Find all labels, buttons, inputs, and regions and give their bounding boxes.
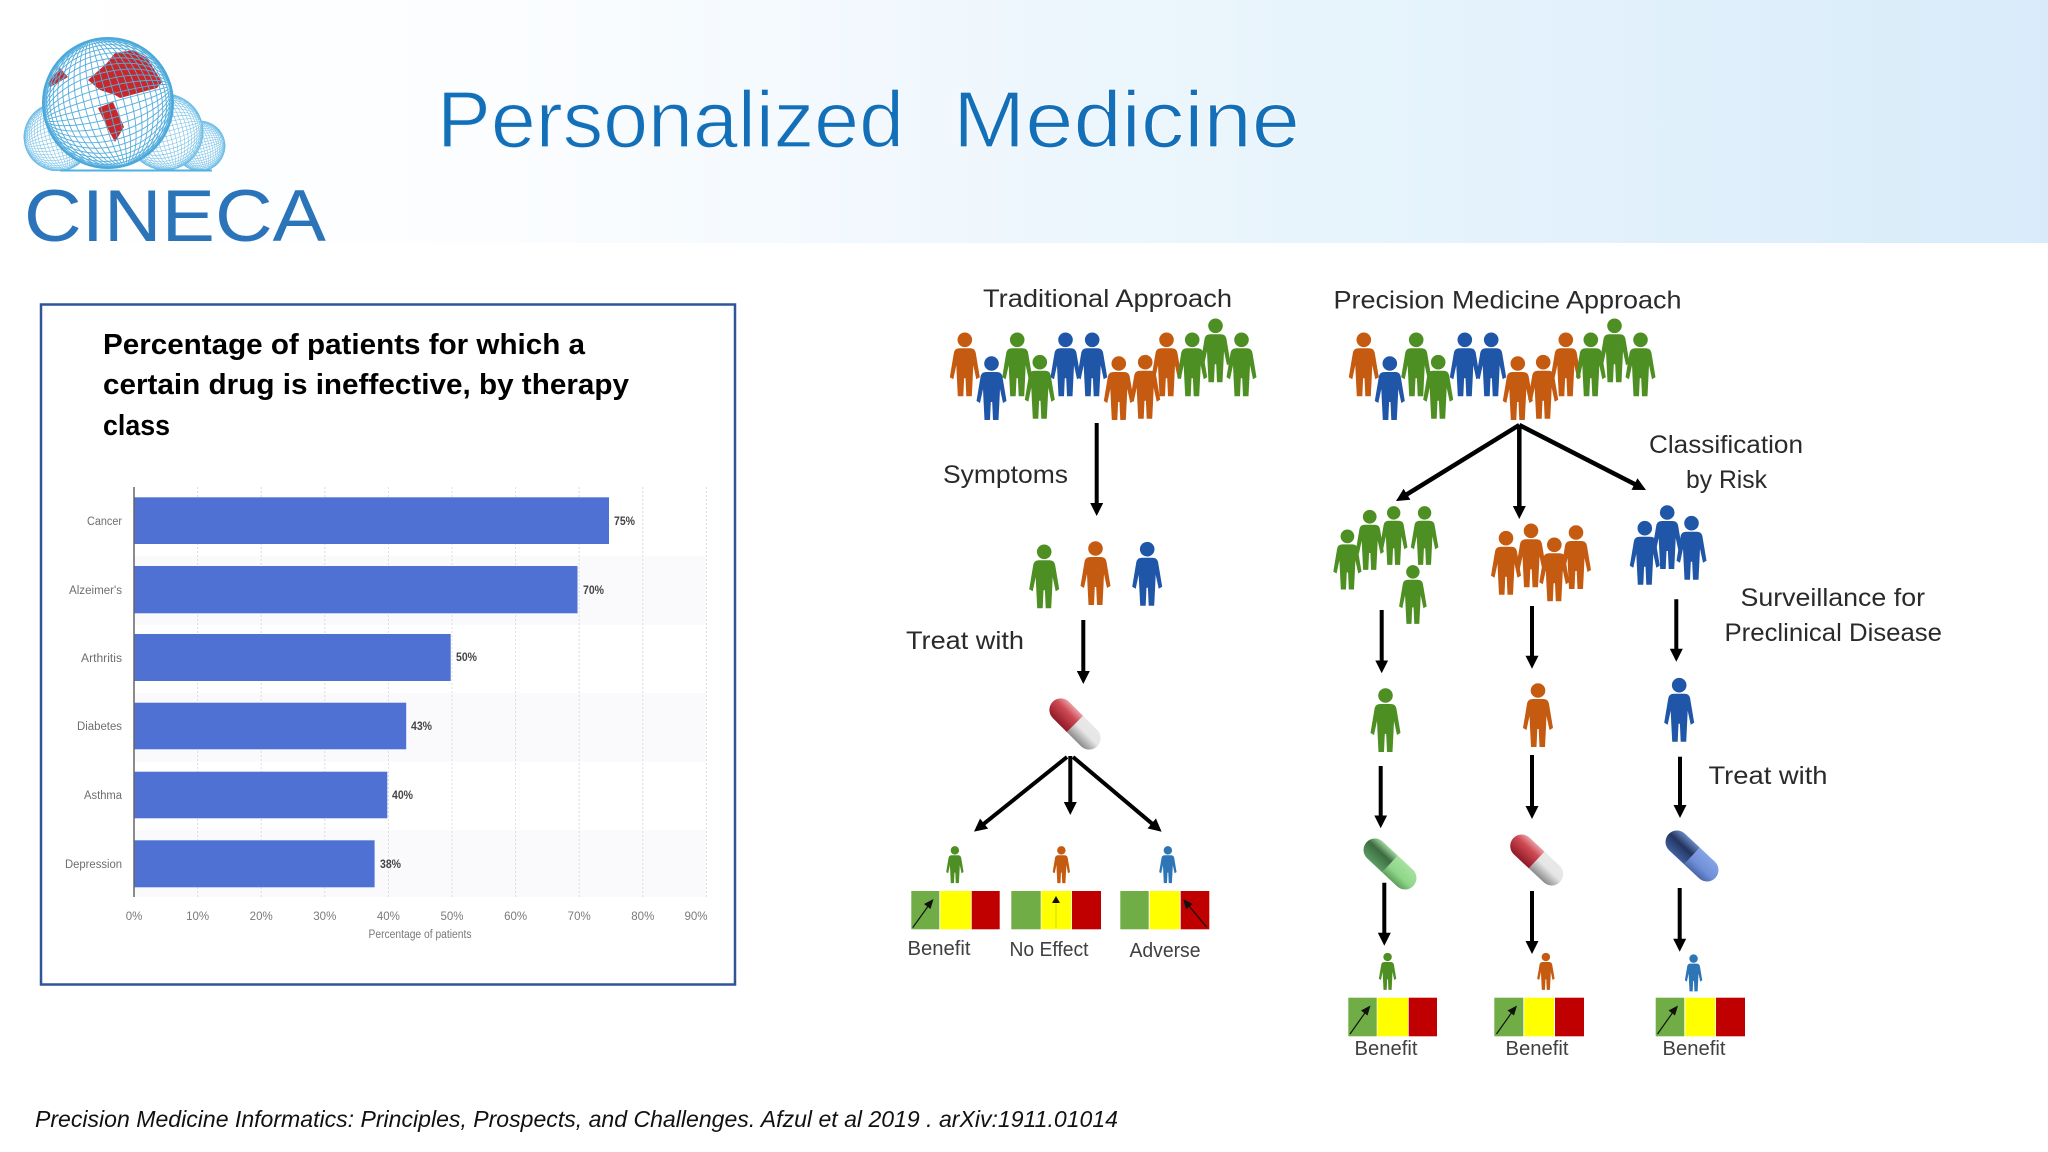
arrow: no effect branch	[1068, 756, 1072, 805]
title: Medicine	[953, 75, 1300, 164]
x axis labels: 40%	[377, 911, 400, 923]
diagram: precision medicine approach	[1333, 286, 1942, 1060]
category labels: Diabetes	[77, 721, 122, 733]
diagram: traditional approach	[906, 285, 1256, 962]
arrow: to green group	[1404, 425, 1519, 496]
label: surveillance for preclinical disease: Preclinical Disease	[1724, 619, 1942, 647]
x axis labels	[126, 911, 708, 941]
logo: CINECA	[24, 37, 326, 242]
x axis labels: 0%	[126, 911, 142, 923]
single patients	[1370, 678, 1694, 752]
outcome: blue benefit: Benefit	[1662, 1038, 1726, 1060]
value labels: 50%	[456, 652, 477, 664]
category labels: Arthritis	[81, 653, 122, 665]
category labels: Asthma	[84, 790, 123, 802]
icon: red pill	[1045, 694, 1105, 754]
icon: green pill	[1359, 834, 1421, 894]
arrows: surveillance	[1382, 599, 1676, 663]
population group	[950, 318, 1256, 420]
label: classification by risk: Classification	[1649, 431, 1803, 459]
x axis labels: 30%	[313, 911, 336, 923]
outcome: blue benefit	[1656, 954, 1745, 1060]
risk group: blue	[1630, 505, 1706, 585]
panel: drug ineffectiveness chart	[41, 304, 735, 984]
icon: red pill	[1505, 830, 1568, 890]
outcome: benefit: Benefit	[908, 938, 971, 960]
category labels	[65, 516, 123, 871]
x axis labels: 20%	[250, 911, 273, 923]
title	[437, 75, 1300, 164]
x axis labels: 60%	[504, 911, 527, 923]
outcome: no effect: No Effect	[1010, 939, 1089, 961]
arrow: benefit branch	[982, 757, 1067, 825]
outcome: adverse: Adverse	[1130, 940, 1200, 962]
arrows: treat with	[1381, 755, 1680, 818]
outcome: no effect	[1010, 846, 1101, 961]
label: symptoms: Symptoms	[943, 461, 1068, 489]
bars	[134, 497, 609, 887]
bar chart	[65, 487, 708, 941]
arrows: outcome	[1384, 883, 1680, 944]
label: classification by risk: by Risk	[1686, 466, 1767, 494]
label: treat with: Treat with	[1708, 762, 1828, 790]
icon: blue pill	[1661, 826, 1723, 886]
value labels: 75%	[614, 516, 635, 528]
value labels: 38%	[380, 859, 401, 871]
x axis labels: 50%	[440, 911, 464, 923]
arrow: adverse branch	[1073, 757, 1154, 825]
category labels: Alzeimer's	[69, 585, 122, 597]
population group	[1349, 318, 1656, 420]
outcome: green benefit: Benefit	[1354, 1038, 1418, 1060]
heading: traditional approach: Traditional Approach	[983, 285, 1232, 313]
risk group: green	[1333, 506, 1438, 624]
value labels: 40%	[392, 790, 413, 802]
outcome: orange benefit	[1494, 953, 1584, 1060]
arrow: to blue group	[1519, 425, 1637, 485]
value labels: 70%	[583, 585, 604, 597]
value labels: 43%	[411, 721, 432, 733]
heading: precision medicine approach: Precision Medicine Approach	[1334, 286, 1682, 314]
logo wordmark: CINECA	[24, 176, 326, 257]
outcome: green benefit	[1348, 953, 1437, 1060]
label: surveillance for preclinical disease: Surveillance for	[1740, 584, 1925, 612]
category labels: Cancer	[87, 516, 122, 528]
x axis labels: Percentage of patients	[368, 929, 472, 941]
panel heading	[103, 329, 629, 442]
panel heading: class	[103, 410, 170, 442]
title: Personalized	[437, 75, 904, 164]
panel heading: Percentage of patients for which a	[103, 329, 586, 361]
outcome: adverse	[1120, 846, 1209, 962]
arrow: symptoms	[1095, 423, 1099, 506]
category labels: Depression	[65, 859, 122, 871]
citation: Precision Medicine Informatics: Principles, Prospects, and Challenges. Afzul et al 2019 . arXiv:1911.01014	[35, 1106, 1118, 1132]
x axis labels: 80%	[631, 911, 654, 923]
label: classification by risk	[1649, 431, 1803, 494]
outcome: benefit	[908, 846, 1000, 960]
arrow: to orange group	[1517, 425, 1522, 509]
header band	[0, 0, 2048, 243]
three patients	[1029, 541, 1162, 608]
x axis labels: 90%	[684, 911, 708, 923]
outcome: orange benefit: Benefit	[1506, 1038, 1569, 1060]
label: treat with: Treat with	[906, 627, 1024, 655]
x axis labels: 10%	[186, 911, 209, 923]
logo cloud globes	[24, 37, 226, 171]
value labels	[380, 516, 635, 871]
x axis labels: 70%	[568, 911, 591, 923]
panel heading: certain drug is ineffective, by therapy	[103, 369, 629, 401]
arrow: treat	[1081, 620, 1085, 674]
label: surveillance for preclinical disease	[1724, 584, 1942, 647]
risk group: orange	[1491, 524, 1591, 601]
